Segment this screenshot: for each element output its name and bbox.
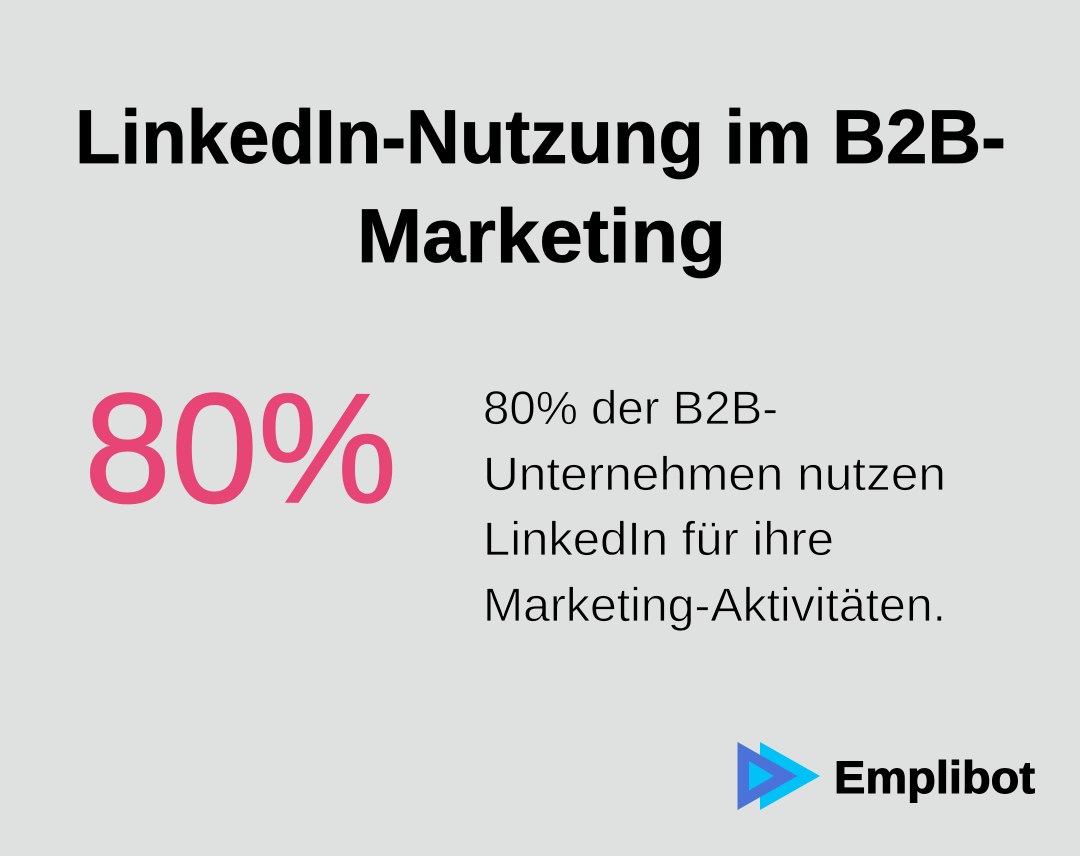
- description text: LinkedIn für ihre: [483, 512, 834, 565]
- title: [75, 95, 1006, 279]
- big statistic: 80%: [84, 362, 397, 536]
- title: LinkedIn-Nutzung im B2B-: [75, 95, 1006, 180]
- logo: Emplibot: [738, 742, 1035, 810]
- icon: play triangles: [738, 742, 820, 810]
- title: Marketing: [357, 194, 726, 279]
- logo wordmark: Emplibot: [834, 752, 1035, 803]
- description text: Unternehmen nutzen: [483, 447, 946, 500]
- description text: Marketing-Aktivitäten.: [483, 578, 946, 631]
- description text: 80% der B2B-: [483, 381, 778, 434]
- description text: [483, 381, 946, 631]
